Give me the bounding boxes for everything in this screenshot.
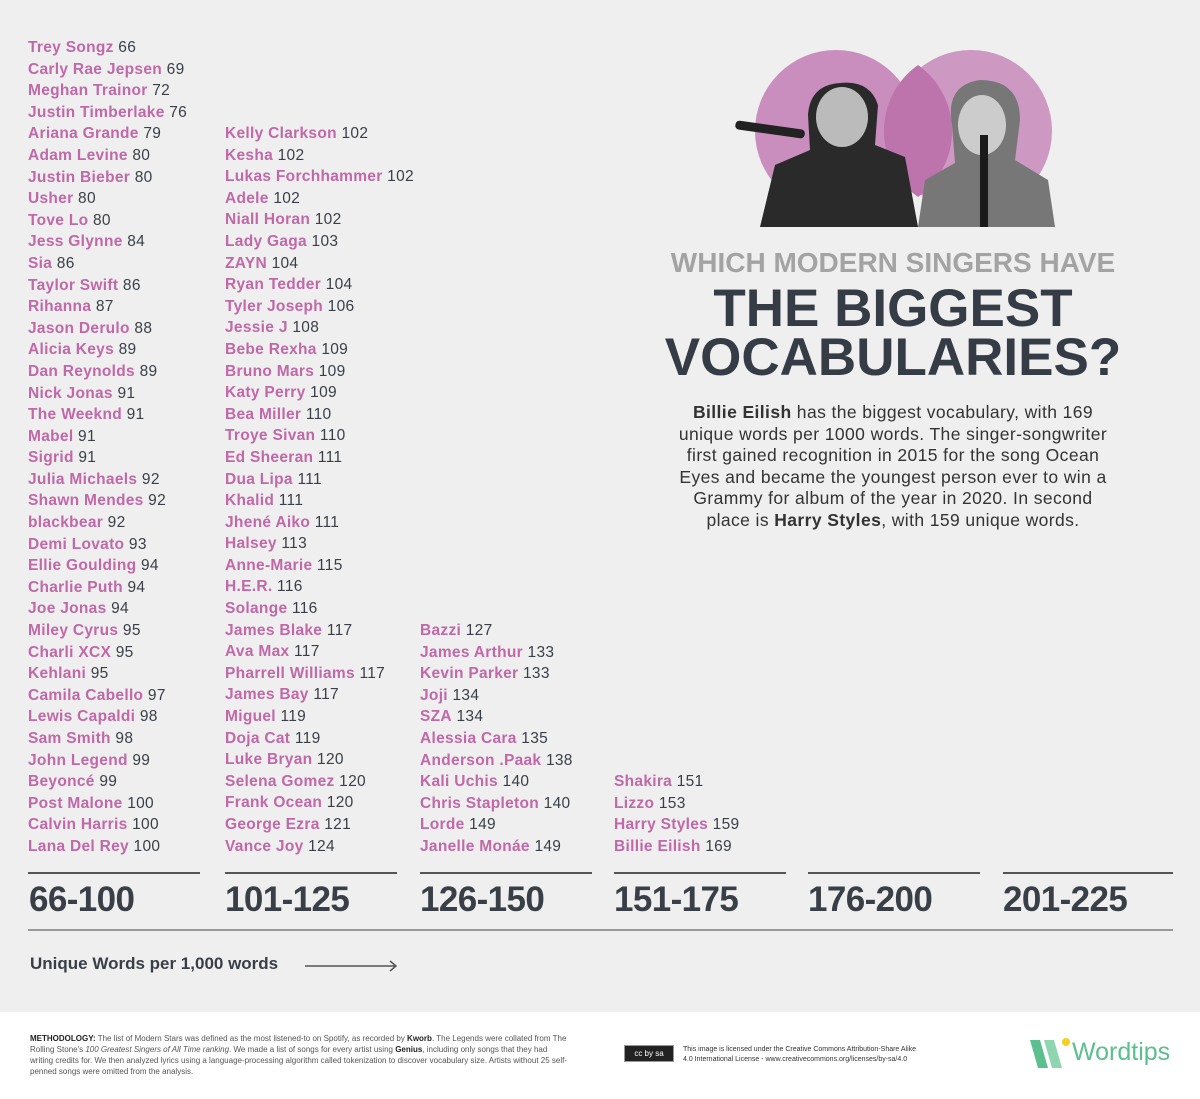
column: 66-100: Kehlani 95 (28, 665, 109, 682)
column: 126-150 (420, 622, 573, 855)
column: 101-125: Troye Sivan 110 (225, 427, 346, 444)
column: 66-100: Miley Cyrus 95 (28, 622, 141, 639)
column: 66-100: blackbear 92 (28, 514, 126, 531)
column: 101-125: Bea Miller 110 (225, 406, 331, 423)
title: THE BIGGEST (713, 279, 1073, 338)
column: 66-100: Jess Glynne 84 (28, 233, 145, 250)
column: 66-100: Usher 80 (28, 190, 96, 207)
column: 101-125: Ed Sheeran 111 (225, 449, 342, 466)
column: 101-125: Katy Perry 109 (225, 384, 337, 401)
column: 101-125: George Ezra 121 (225, 816, 351, 833)
license: cc by sa (634, 1049, 664, 1058)
description: Eyes and became the youngest person ever to win a (679, 467, 1107, 487)
column: 66-100: Meghan Trainor 72 (28, 82, 170, 99)
column: 101-125: Adele 102 (225, 190, 300, 207)
column: 101-125: Anne-Marie 115 (225, 557, 343, 574)
title: VOCABULARIES? (665, 328, 1121, 387)
column: 66-100: Justin Bieber 80 (28, 169, 153, 186)
logo: Wordtips (1030, 1038, 1170, 1068)
column: 101-125: Selena Gomez 120 (225, 773, 366, 790)
column: 101-125: Ava Max 117 (225, 643, 320, 660)
range labels: 101-125 (225, 880, 349, 919)
column: 126-150: Joji 134 (420, 687, 479, 704)
column: 101-125: Kelly Clarkson 102 (225, 125, 368, 142)
column: 101-125: Kesha 102 (225, 147, 304, 164)
column: 66-100: Sia 86 (28, 255, 75, 272)
column: 151-175 (614, 773, 739, 855)
Harry (918, 80, 1055, 227)
description (679, 402, 1107, 530)
column: 66-100: Tove Lo 80 (28, 212, 111, 229)
column: 66-100: Carly Rae Jepsen 69 (28, 61, 184, 78)
column: 151-175: Shakira 151 (614, 773, 703, 790)
footer: 4.0 International License - www.creativecommons.org/licenses/by-sa/4.0 (683, 1056, 907, 1063)
column: 66-100: Dan Reynolds 89 (28, 363, 157, 380)
column: 66-100: Camila Cabello 97 (28, 687, 166, 704)
column: 66-100: Charli XCX 95 (28, 644, 134, 661)
column: 66-100: Taylor Swift 86 (28, 277, 141, 294)
column: 126-150: Chris Stapleton 140 (420, 795, 570, 812)
column: 66-100: Joe Jonas 94 (28, 600, 129, 617)
column: 101-125: Ryan Tedder 104 (225, 276, 352, 293)
column: 126-150: SZA 134 (420, 708, 483, 725)
column: 66-100: Julia Michaels 92 (28, 471, 160, 488)
column: 101-125: Halsey 113 (225, 535, 307, 552)
column: 66-100: John Legend 99 (28, 752, 150, 769)
column: 66-100: Alicia Keys 89 (28, 341, 136, 358)
column: 101-125: ZAYN 104 (225, 255, 298, 272)
column: 101-125: Doja Cat 119 (225, 730, 320, 747)
axis label: Unique Words per 1,000 words (30, 954, 278, 973)
column: 101-125: Lady Gaga 103 (225, 233, 338, 250)
column: 66-100: Lewis Capaldi 98 (28, 708, 158, 725)
column: 126-150: Janelle Monáe 149 (420, 838, 561, 855)
column: 66-100: Justin Timberlake 76 (28, 104, 187, 121)
column: 151-175: Lizzo 153 (614, 795, 686, 812)
column: 66-100: Adam Levine 80 (28, 147, 150, 164)
license (624, 1045, 674, 1062)
description: first gained recognition in 2015 for the song Ocean (687, 445, 1099, 465)
column: 66-100: Jason Derulo 88 (28, 320, 152, 337)
description: Billie Eilish has the biggest vocabulary, with 169 (693, 402, 1093, 422)
column: 66-100: Charlie Puth 94 (28, 579, 145, 596)
column: 101-125: Lukas Forchhammer 102 (225, 168, 414, 185)
column: 66-100: Sigrid 91 (28, 449, 96, 466)
column: 101-125: Frank Ocean 120 (225, 794, 354, 811)
column: 66-100: Beyoncé 99 (28, 773, 117, 790)
arrow (305, 960, 397, 972)
footer (0, 1012, 1200, 1099)
column: 126-150: Bazzi 127 (420, 622, 492, 639)
column: 101-125: Niall Horan 102 (225, 211, 342, 228)
column: 126-150: James Arthur 133 (420, 644, 554, 661)
column: 101-125: Pharrell Williams 117 (225, 665, 385, 682)
column: 101-125: James Blake 117 (225, 622, 352, 639)
column: 101-125: Jessie J 108 (225, 319, 319, 336)
column: 126-150: Lorde 149 (420, 816, 496, 833)
column: 101-125: Dua Lipa 111 (225, 470, 322, 488)
column: 101-125: Vance Joy 124 (225, 838, 335, 855)
column: 151-175: Billie Eilish 169 (614, 838, 732, 855)
column: 66-100: Calvin Harris 100 (28, 816, 159, 833)
Billie (760, 83, 918, 227)
title: WHICH MODERN SINGERS HAVE (671, 247, 1115, 278)
range labels: 126-150 (420, 880, 544, 919)
title (665, 247, 1121, 387)
description: unique words per 1000 words. The singer-songwriter (679, 424, 1107, 444)
column: 101-125: Solange 116 (225, 600, 318, 617)
range labels: 151-175 (614, 880, 738, 919)
column: 126-150: Alessia Cara 135 (420, 730, 548, 747)
methodology: METHODOLOGY: The list of Modern Stars was defined as the most listened-to on Spotify, as recorded by Kworb. The Legends were collated from The Rolling Stone's 100 Greatest Singers of All Time ranking. We made a list of songs for every artist using Genius, including only songs that they had writing credits for. We then analyzed lyrics using a language-processing algorithm called tokenization to discover vocabulary size. Artists without 25 self-penned songs were omitted from the analysis. (30, 1034, 567, 1076)
column: 66-100: Mabel 91 (28, 428, 96, 445)
column: 66-100: Sam Smith 98 (28, 730, 133, 747)
description: place is Harry Styles, with 159 unique words. (706, 510, 1080, 530)
column: 66-100: The Weeknd 91 (28, 406, 144, 423)
column: 126-150: Kevin Parker 133 (420, 665, 550, 682)
column: 101-125: Luke Bryan 120 (225, 751, 344, 768)
column: 101-125: Tyler Joseph 106 (225, 298, 354, 315)
column: 126-150: Anderson .Paak 138 (420, 752, 573, 769)
column: 151-175: Harry Styles 159 (614, 816, 739, 833)
column: 66-100: Post Malone 100 (28, 795, 154, 812)
logo: Wordtips: Wordtips (1072, 1038, 1170, 1066)
column: 66-100 (28, 39, 187, 855)
column: 66-100: Lana Del Rey 100 (28, 838, 160, 855)
photos: singers (735, 50, 1055, 227)
description: Grammy for album of the year in 2020. In second (693, 488, 1093, 508)
column: 101-125: Jhené Aiko 111 (225, 514, 339, 531)
column: 126-150: Kali Uchis 140 (420, 773, 529, 790)
column: 101-125: Miguel 119 (225, 708, 306, 725)
column: 66-100: Nick Jonas 91 (28, 384, 135, 402)
column: 66-100: Demi Lovato 93 (28, 536, 147, 553)
column: 66-100: Trey Songz 66 (28, 39, 136, 56)
column: 101-125: Khalid 111 (225, 492, 303, 509)
column: 66-100: Rihanna 87 (28, 298, 114, 315)
footer: This image is licensed under the Creative Commons Attribution-Share Alike (683, 1046, 916, 1053)
range labels: 201-225 (1003, 880, 1127, 919)
column: 66-100: Ariana Grande 79 (28, 125, 161, 142)
range labels: 176-200 (808, 880, 932, 919)
range labels: 66-100 (29, 880, 134, 919)
column: 66-100: Shawn Mendes 92 (28, 492, 166, 509)
column: 101-125: Bebe Rexha 109 (225, 341, 348, 358)
column: 101-125 (225, 125, 414, 855)
column: 101-125: Bruno Mars 109 (225, 363, 346, 380)
column: 101-125: James Bay 117 (225, 686, 339, 703)
column: 66-100: Ellie Goulding 94 (28, 557, 159, 574)
column: 101-125: H.E.R. 116 (225, 578, 303, 595)
